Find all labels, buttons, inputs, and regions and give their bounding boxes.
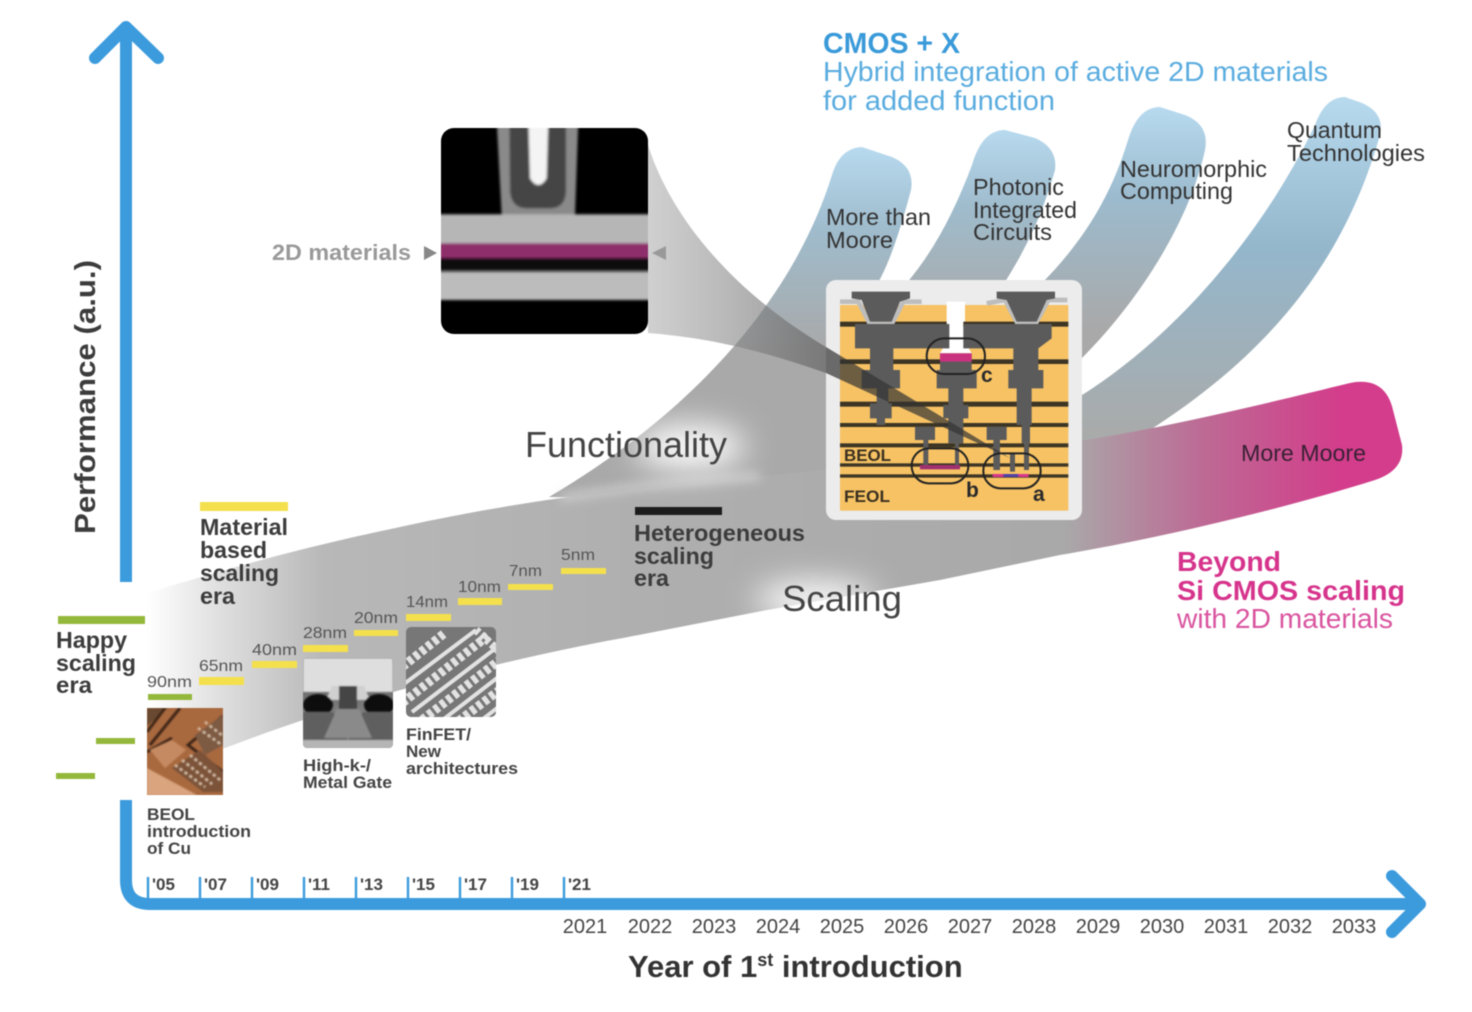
node labels xyxy=(147,547,595,691)
node labels: 5nm xyxy=(561,547,595,564)
heading: CMOS + X: CMOS + X xyxy=(823,28,961,60)
glow behind Scaling xyxy=(755,582,875,618)
caption: High-k Metal Gate: High-k-/ xyxy=(303,756,371,775)
x axis ticks: '17 xyxy=(464,875,487,894)
x axis years: 2022 xyxy=(628,916,672,938)
caption: High-k Metal Gate: Metal Gate xyxy=(303,773,392,792)
callout rings xyxy=(912,338,1041,488)
caption: BEOL introduction of Cu: BEOL xyxy=(147,805,195,824)
x axis years: 2030 xyxy=(1140,916,1184,938)
label: Quantum Technologies xyxy=(1287,117,1425,166)
node labels: 10nm xyxy=(458,579,501,596)
TEM image xyxy=(440,127,649,335)
label: More than Moore xyxy=(826,204,931,253)
node labels: 65nm xyxy=(199,658,243,675)
label: Photonic Integrated Circuits: Photonic xyxy=(973,174,1064,200)
x axis ticks xyxy=(148,875,591,900)
image: high-k metal gate xyxy=(303,658,394,748)
label: Neuromorphic Computing: Neuromorphic xyxy=(1120,156,1267,182)
node labels: 90nm xyxy=(147,674,192,691)
label: Quantum Technologies: Technologies xyxy=(1287,140,1425,166)
x axis ticks: '05 xyxy=(152,875,175,894)
chip labels: a xyxy=(1033,483,1045,506)
caption: BEOL introduction of Cu: introduction xyxy=(147,822,251,841)
funnel from TEM image to chip xyxy=(648,145,1010,458)
caption: FinFET New architectures: FinFET/ xyxy=(406,725,471,744)
x axis ticks: '11 xyxy=(308,875,330,894)
ridge between functionality and scaling bands xyxy=(560,476,760,498)
x axis ticks: '07 xyxy=(204,875,227,894)
chip labels: FEOL xyxy=(844,487,890,506)
era: Heterogeneous scaling: era xyxy=(634,565,669,591)
label: Neuromorphic Computing xyxy=(1120,156,1267,204)
x axis years: 2021 xyxy=(563,916,607,938)
x axis years: 2032 xyxy=(1268,916,1312,938)
caption: BEOL introduction of Cu: of Cu xyxy=(147,839,191,858)
era: Happy scaling: scaling xyxy=(56,650,136,676)
yellow node bars xyxy=(199,568,606,685)
x axis arrow xyxy=(126,800,1420,932)
x axis years: 2033 xyxy=(1332,916,1376,938)
x axis title: st xyxy=(757,950,773,970)
era: Happy scaling: era xyxy=(56,672,92,698)
label: More than Moore: More than xyxy=(826,204,931,230)
caption: High-k Metal Gate xyxy=(303,756,392,792)
x axis years xyxy=(563,916,1376,938)
era: Material based scaling: based xyxy=(200,537,267,563)
era: Material based scaling xyxy=(200,502,288,609)
channel layers xyxy=(430,214,663,244)
2D materials label xyxy=(272,240,666,265)
stream: Photonic Integrated Circuits xyxy=(905,130,1055,420)
x axis years: 2026 xyxy=(884,916,928,938)
x axis years: 2024 xyxy=(756,916,800,938)
stream: Quantum Technologies xyxy=(1070,97,1381,450)
heading: CMOS + X xyxy=(823,28,1328,116)
chip labels: b xyxy=(966,479,979,502)
label: Neuromorphic Computing: Computing xyxy=(1120,178,1233,204)
stream: More than Moore xyxy=(549,147,912,500)
era: Material based scaling: era xyxy=(200,583,235,609)
caption: FinFET New architectures: architectures xyxy=(406,759,518,778)
x axis years: 2028 xyxy=(1012,916,1056,938)
image: BEOL copper xyxy=(147,708,223,795)
yellow substrate xyxy=(840,305,1068,511)
label: More than Moore: Moore xyxy=(826,227,893,253)
2D materials label: 2D materials xyxy=(272,240,411,265)
heading: CMOS + X: for added function xyxy=(823,85,1055,116)
era: Happy scaling xyxy=(56,616,145,698)
label: Photonic Integrated Circuits xyxy=(973,174,1077,245)
era: Heterogeneous scaling: Heterogeneous xyxy=(634,520,805,546)
caption: BEOL introduction of Cu xyxy=(147,805,251,858)
stream: Neuromorphic Computing xyxy=(1040,107,1206,440)
x axis ticks: '15 xyxy=(412,875,435,894)
gate stack xyxy=(497,120,578,215)
caption: FinFET New architectures xyxy=(406,725,518,778)
y axis arrow xyxy=(95,27,158,582)
heading: CMOS + X: Hybrid integration of active 2D materials xyxy=(823,56,1328,87)
glow behind Functionality xyxy=(635,425,745,469)
label: Photonic Integrated Circuits: Circuits xyxy=(973,219,1052,245)
heading: Beyond Si CMOS scaling: with 2D materials xyxy=(1176,603,1393,634)
x axis years: 2023 xyxy=(692,916,736,938)
x axis years: 2029 xyxy=(1076,916,1120,938)
era: Material based scaling: Material xyxy=(200,514,288,540)
white channel xyxy=(940,302,972,353)
era: Heterogeneous scaling: scaling xyxy=(634,543,714,569)
label: Scaling: Scaling xyxy=(782,578,902,619)
x axis ticks: '21 xyxy=(568,875,591,894)
x axis ticks: '19 xyxy=(516,875,539,894)
node labels: 28nm xyxy=(303,625,347,642)
2D layers xyxy=(940,353,972,362)
label: Functionality: Functionality xyxy=(525,424,727,465)
x axis title: Year of 1 xyxy=(628,949,757,984)
node labels: 40nm xyxy=(252,642,297,659)
x axis years: 2031 xyxy=(1204,916,1248,938)
vias xyxy=(852,292,1055,472)
chip labels: BEOL xyxy=(844,446,891,465)
label: More Moore: More Moore xyxy=(1241,440,1366,466)
x axis ticks: '13 xyxy=(360,875,383,894)
main scaling band with More Moore end xyxy=(147,382,1402,748)
x axis title: introduction xyxy=(773,949,963,984)
node labels: 7nm xyxy=(509,563,542,580)
x axis ticks: '09 xyxy=(256,875,279,894)
node labels: 14nm xyxy=(406,594,448,611)
label: Photonic Integrated Circuits: Integrated xyxy=(973,197,1077,223)
heading: Beyond Si CMOS scaling: Si CMOS scaling xyxy=(1177,575,1405,606)
image: FinFET xyxy=(405,626,497,718)
era: Happy scaling: Happy xyxy=(56,627,127,653)
x axis years: 2025 xyxy=(820,916,864,938)
chip cross-section panel xyxy=(826,280,1082,520)
chip labels: c xyxy=(981,364,993,387)
heading: Beyond Si CMOS scaling xyxy=(1176,546,1405,634)
chip labels xyxy=(844,364,1045,506)
metal lines xyxy=(840,322,1068,478)
funnel overlay on chip xyxy=(826,347,1010,458)
era: Material based scaling: scaling xyxy=(200,560,279,586)
green node bars xyxy=(56,694,192,779)
era: Heterogeneous scaling xyxy=(634,507,805,591)
node labels: 20nm xyxy=(354,610,398,627)
caption: FinFET New architectures: New xyxy=(406,742,442,761)
y axis label: Performance (a.u.) xyxy=(70,260,102,534)
label: Quantum Technologies: Quantum xyxy=(1287,117,1382,143)
heading: Beyond Si CMOS scaling: Beyond xyxy=(1177,546,1281,577)
x axis years: 2027 xyxy=(948,916,992,938)
liner xyxy=(840,300,1067,324)
